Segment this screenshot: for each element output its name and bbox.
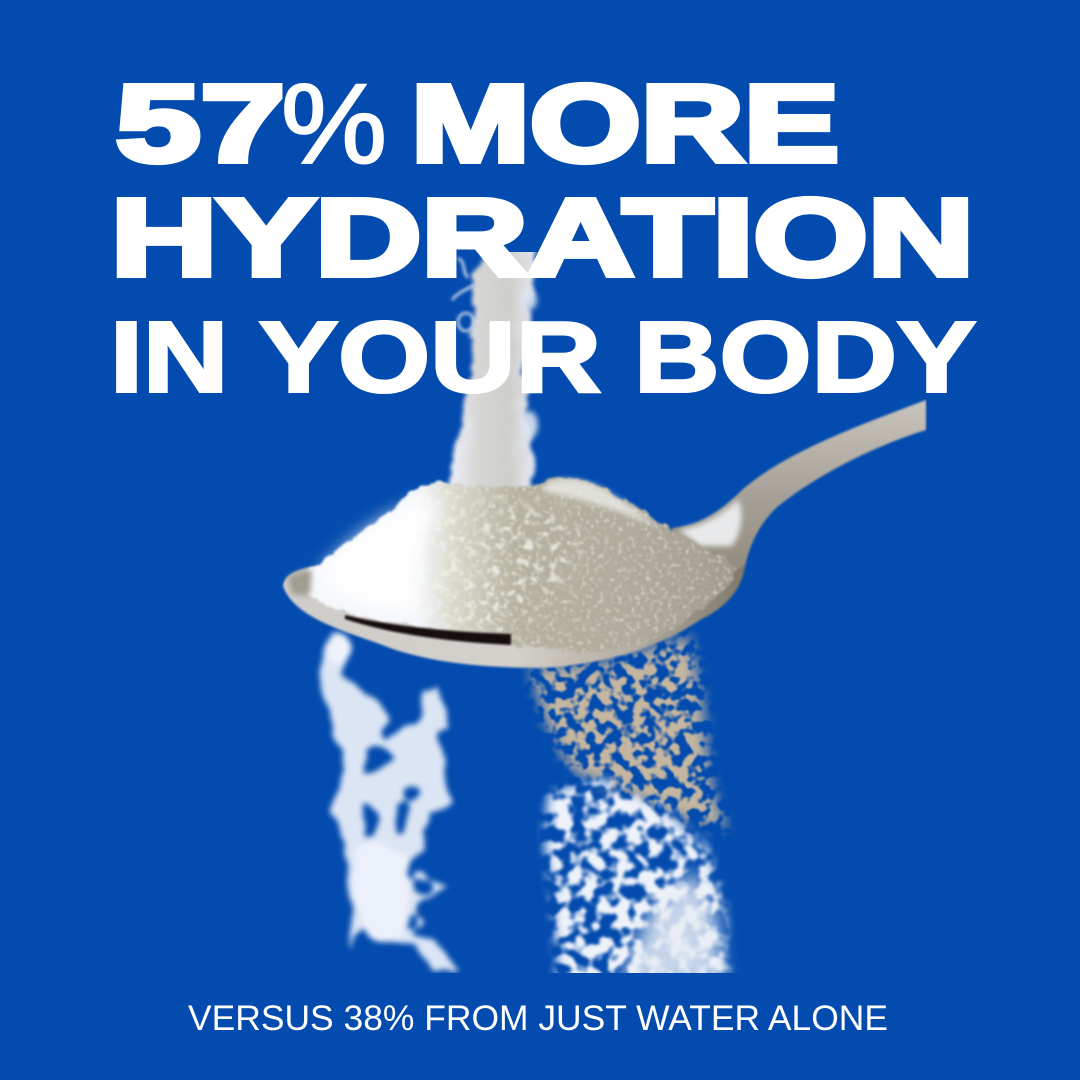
spoon bowl (283, 566, 745, 668)
right falling powder: white grains (544, 778, 728, 985)
white cap on right shoulder (545, 479, 660, 528)
spoon handle (668, 400, 926, 590)
handle highlight (678, 500, 741, 546)
bright side of the pile (320, 498, 440, 612)
pouring powder stream (450, 246, 538, 495)
sparkling center highlights (420, 501, 576, 640)
title (110, 61, 976, 414)
right falling powder: tan grains (530, 636, 728, 830)
title line 2: HYDRATION: HYDRATION (111, 177, 974, 299)
bright droplet (324, 633, 350, 667)
title line 1: percent sign: % (281, 61, 387, 187)
title line 1: MORE: MORE (411, 63, 839, 185)
left falling powder (321, 632, 460, 972)
curly powder wisps (452, 258, 474, 331)
grey rim at spoon tip (288, 570, 312, 596)
dark gap under the powder (345, 615, 511, 645)
title line 3: IN YOUR BODY: IN YOUR BODY (110, 302, 976, 414)
title line 1: 57: 57 (116, 63, 285, 185)
comparison caption: VERSUS 38% FROM JUST WATER ALONE (188, 999, 888, 1038)
photo: spoon with powder (283, 246, 926, 985)
infographic canvas (116, 82, 978, 1030)
dense white powder patch (620, 870, 722, 985)
powder pile (296, 478, 736, 652)
soft side puffs (520, 290, 538, 439)
bright core (354, 842, 409, 942)
